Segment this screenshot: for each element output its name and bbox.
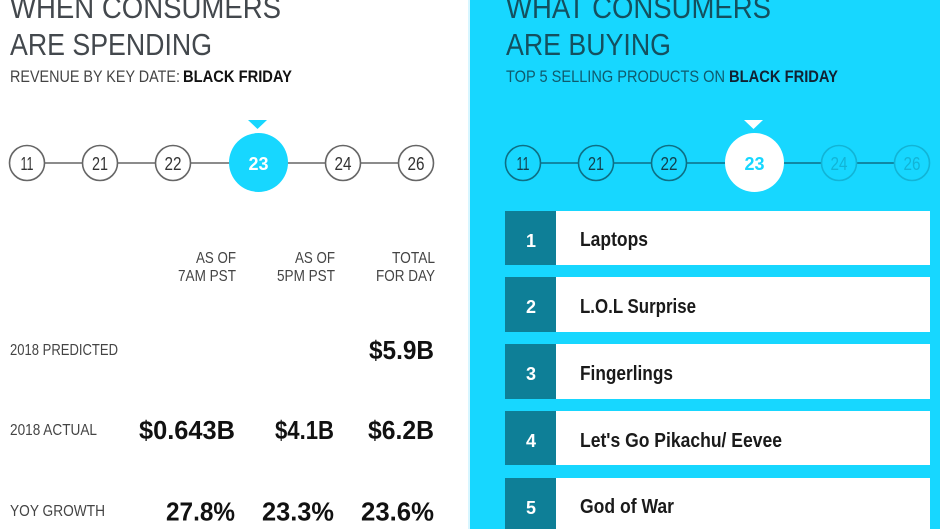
column headers: FOR DAY xyxy=(376,268,435,285)
revenue table xyxy=(10,250,435,526)
subheading: revenue by key date xyxy=(10,68,292,86)
date timeline: products: 11 xyxy=(516,154,530,174)
product 3: 3 xyxy=(526,364,536,384)
date timeline: revenue: 26 xyxy=(408,154,424,174)
row: 2018 actual xyxy=(10,417,434,445)
date timeline: revenue: 24 xyxy=(334,154,352,174)
product 1: 1 xyxy=(526,231,536,251)
date timeline: revenue xyxy=(10,120,434,192)
product 4 xyxy=(505,411,930,465)
row: 2018 actual: $4.1B xyxy=(275,417,334,445)
heading: what consumers are buying: ARE BUYING xyxy=(506,27,671,62)
row: 2018 actual: $6.2B xyxy=(368,417,434,445)
date timeline: products: 21 xyxy=(588,154,604,174)
row: 2018 predicted xyxy=(10,337,434,365)
product 3 xyxy=(505,344,930,399)
heading: when consumers are spending: ARE SPENDING xyxy=(10,27,212,62)
product 4: 4 xyxy=(526,431,536,451)
product 5 xyxy=(505,478,930,529)
row: yoy growth xyxy=(10,498,434,526)
column headers: 5PM PST xyxy=(277,268,335,285)
row: yoy growth: YOY GROWTH xyxy=(10,503,105,520)
subheading: top 5 selling products: TOP 5 SELLING PRODUCTS ON xyxy=(506,68,725,86)
column headers: AS OF xyxy=(295,250,335,267)
row: 2018 predicted: $5.9B xyxy=(369,337,434,365)
product list xyxy=(505,211,930,529)
heading: when consumers are spending xyxy=(10,0,281,62)
date timeline: products: 22 xyxy=(660,154,678,174)
date timeline: revenue: 11 xyxy=(20,154,34,174)
column headers xyxy=(178,250,435,285)
row: 2018 actual: $0.643B xyxy=(139,417,235,445)
date timeline: revenue: 21 xyxy=(92,154,108,174)
column headers: AS OF xyxy=(196,250,236,267)
panel: when consumers are spending xyxy=(0,0,468,529)
date timeline: products xyxy=(506,120,930,192)
product 1 xyxy=(505,211,930,265)
date timeline: revenue: 22 xyxy=(164,154,182,174)
column headers: TOTAL xyxy=(392,250,435,267)
date timeline: products: 24 xyxy=(830,154,848,174)
date timeline: revenue: 23 xyxy=(248,154,268,174)
product 2: 2 xyxy=(526,297,536,317)
product 4: Let's Go Pikachu/ Eevee xyxy=(580,430,782,452)
product 2: L.O.L Surprise xyxy=(580,296,696,318)
product 3: Fingerlings xyxy=(580,363,673,385)
subheading: revenue by key date: REVENUE BY KEY DATE: xyxy=(10,68,180,86)
heading: what consumers are buying xyxy=(506,0,771,62)
column headers: 7AM PST xyxy=(178,268,236,285)
product 5: 5 xyxy=(526,498,536,518)
panel: what consumers are buying xyxy=(470,0,940,529)
row: yoy growth: 23.6% xyxy=(361,498,434,526)
product 1: Laptops xyxy=(580,229,648,251)
date timeline: products: 23 xyxy=(744,154,764,174)
product 5: God of War xyxy=(580,496,674,518)
product 2 xyxy=(505,277,930,332)
row: yoy growth: 23.3% xyxy=(262,498,334,526)
row: yoy growth: 27.8% xyxy=(166,498,235,526)
row: 2018 actual: 2018 ACTUAL xyxy=(10,422,97,439)
subheading: top 5 selling products: BLACK FRIDAY xyxy=(729,68,838,86)
row: 2018 predicted: 2018 PREDICTED xyxy=(10,342,118,359)
date timeline: products: 26 xyxy=(904,154,920,174)
subheading: revenue by key date: BLACK FRIDAY xyxy=(183,68,292,86)
